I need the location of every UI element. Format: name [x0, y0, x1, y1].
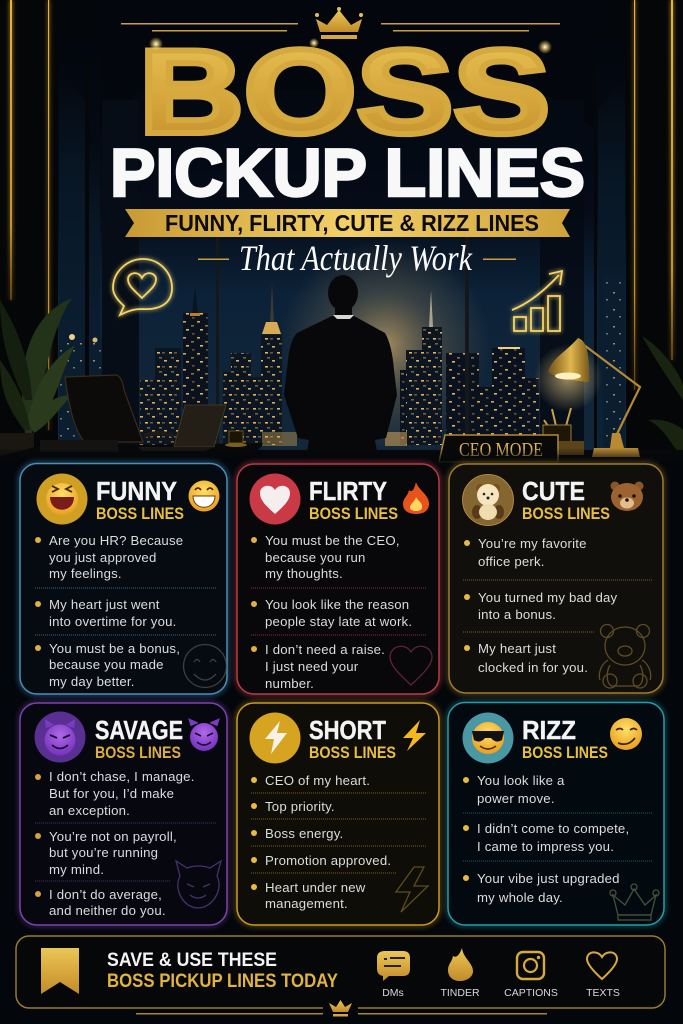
joke list: You turned my bad day [478, 590, 618, 605]
joke list: But for you, I’d make [49, 786, 174, 801]
joke list: You look like the reason [265, 597, 409, 612]
joke list: Heart under new [265, 880, 366, 895]
right plant [642, 336, 683, 460]
joke list: You must be the CEO, [265, 533, 400, 548]
call to action text [107, 950, 338, 992]
call to action text: BOSS PICKUP LINES TODAY [107, 971, 338, 992]
joke list: into a bonus. [478, 607, 556, 622]
joke list: Are you HR? Because [49, 533, 183, 548]
icon: Tinder flame [440, 948, 480, 999]
panel: rizz [448, 702, 664, 925]
ribbon subtitle: FUNNY, FLIRTY, CUTE & RIZZ LINES [165, 210, 539, 236]
joke list: Boss energy. [265, 826, 343, 841]
joke list [251, 533, 427, 691]
icon: grin emoji [188, 480, 220, 512]
laptop [138, 405, 226, 451]
ghost icon: devil [176, 861, 221, 908]
heading: FUNNY [96, 476, 177, 506]
icon: laughing face [36, 474, 88, 524]
joke list: I came to impress you. [477, 839, 614, 854]
CEO MODE nameplate [439, 435, 558, 462]
icon: bookmark [41, 948, 79, 994]
call to action text: SAVE & USE THESE [107, 950, 277, 971]
panel: flirty [237, 464, 439, 694]
heading [309, 476, 398, 523]
joke list: power move. [477, 791, 555, 806]
office scene background [0, 0, 683, 464]
icon: Tinder flame: TINDER [440, 987, 480, 999]
icon: sunglasses badge [462, 712, 514, 764]
heading [522, 476, 610, 523]
coffee cup [225, 431, 247, 447]
heading [95, 715, 183, 762]
joke list: because you made [49, 657, 164, 672]
footer crown ornament [136, 1000, 547, 1016]
panel: funny [20, 464, 227, 694]
joke list: my mind. [49, 862, 104, 877]
joke list: my day better. [49, 674, 135, 689]
panel: cute [449, 464, 663, 693]
icon: DMs: DMs [382, 987, 404, 999]
heading [309, 715, 396, 762]
icon: texts heart [586, 952, 620, 999]
ceiling shadow [100, 0, 596, 130]
window frames [85, 60, 597, 450]
title: BOSS: BOSS [139, 25, 550, 159]
joke list [463, 773, 652, 905]
icon: devil emoji [189, 719, 219, 751]
top decorative lines [121, 23, 560, 32]
joke list: into overtime for you. [49, 614, 177, 629]
joke list: Your vibe just upgraded [477, 871, 620, 886]
heading: BOSS LINES [309, 505, 398, 523]
joke list: CEO of my heart. [265, 773, 370, 788]
ghost icon: heart [390, 646, 432, 685]
joke list: You’re my favorite [478, 536, 587, 551]
joke list: You must be a bonus, [49, 641, 180, 656]
neon growth chart [512, 271, 562, 331]
joke list: people stay late at work. [265, 614, 412, 629]
heading [96, 476, 184, 523]
joke list: You’re not on payroll, [49, 829, 177, 844]
heading: BOSS LINES [96, 505, 184, 523]
crown top ornament [315, 7, 363, 39]
joke list: my thoughts. [265, 566, 343, 581]
heading: BOSS LINES [95, 744, 181, 762]
stack of books [40, 440, 118, 452]
icon: teddy badge [462, 474, 514, 526]
joke list: management. [265, 896, 348, 911]
joke list: Top priority. [265, 799, 335, 814]
footer banner [16, 936, 665, 1008]
heading: RIZZ [522, 715, 576, 745]
heading: SHORT [309, 715, 386, 745]
city skyline [59, 277, 625, 447]
ghost icon: lightning [396, 867, 428, 912]
icon: fire emoji [403, 482, 429, 514]
ghost icon: smile [184, 644, 226, 688]
icon: texts heart: TEXTS [586, 987, 620, 999]
heading: BOSS LINES [309, 744, 396, 762]
ghost icon: crown [610, 884, 659, 920]
heading [522, 715, 608, 762]
plant [0, 298, 75, 457]
icon: DMs [377, 951, 410, 999]
joke list: but you’re running [49, 845, 158, 860]
joke list: I don’t chase, I manage. [49, 769, 195, 784]
panel: short [237, 703, 439, 925]
joke list: My heart just [478, 641, 556, 656]
heading: SAVAGE [95, 715, 183, 745]
desk [0, 443, 683, 463]
ghost icon: teddy bear [599, 624, 651, 688]
joke list [35, 533, 216, 689]
icon: Instagram captions [504, 952, 558, 999]
CEO MODE nameplate: CEO MODE [459, 439, 543, 461]
joke list: my whole day. [477, 890, 563, 905]
title: PICKUP LINES: PICKUP LINES [110, 135, 585, 211]
joke list: you just approved [49, 550, 157, 565]
icon: devil badge [34, 712, 86, 762]
pencil holder [543, 408, 584, 455]
executive chair [65, 375, 174, 442]
joke list: I don’t do average, [49, 887, 162, 902]
joke list: and neither do you. [49, 903, 166, 918]
icon: smirk emoji [610, 718, 642, 750]
joke list: I don’t need a raise. [265, 642, 385, 657]
joke list: Promotion approved. [265, 853, 391, 868]
joke list [463, 536, 652, 675]
joke list [251, 773, 427, 911]
heading: FLIRTY [309, 476, 387, 506]
joke list: number. [265, 676, 314, 691]
heading: CUTE [522, 476, 585, 506]
icon: lightning emoji [403, 720, 426, 751]
heading: BOSS LINES [522, 505, 610, 523]
icon: bolt badge [250, 712, 300, 764]
tagline script: That Actually Work [239, 238, 473, 278]
joke list: because you run [265, 550, 366, 565]
side window panes [59, 70, 625, 450]
joke list: an exception. [49, 803, 130, 818]
icon: Instagram captions: CAPTIONS [504, 987, 558, 999]
desk lamp [534, 338, 640, 457]
joke list: My heart just went [49, 597, 160, 612]
icon: bear emoji [610, 482, 644, 511]
joke list: You look like a [477, 773, 565, 788]
neon speech bubble heart [113, 259, 172, 315]
joke list: I didn’t come to compete, [477, 821, 629, 836]
joke list [35, 769, 216, 918]
businessman silhouette [284, 275, 397, 463]
joke list: I just need your [265, 659, 359, 674]
joke list: clocked in for you. [478, 660, 588, 675]
joke list: my feelings. [49, 566, 122, 581]
panel: savage [20, 703, 227, 925]
gold wall light strips [10, 0, 673, 430]
joke list: office perk. [478, 554, 545, 569]
icon: heart badge [250, 474, 300, 524]
heading: BOSS LINES [522, 744, 608, 762]
